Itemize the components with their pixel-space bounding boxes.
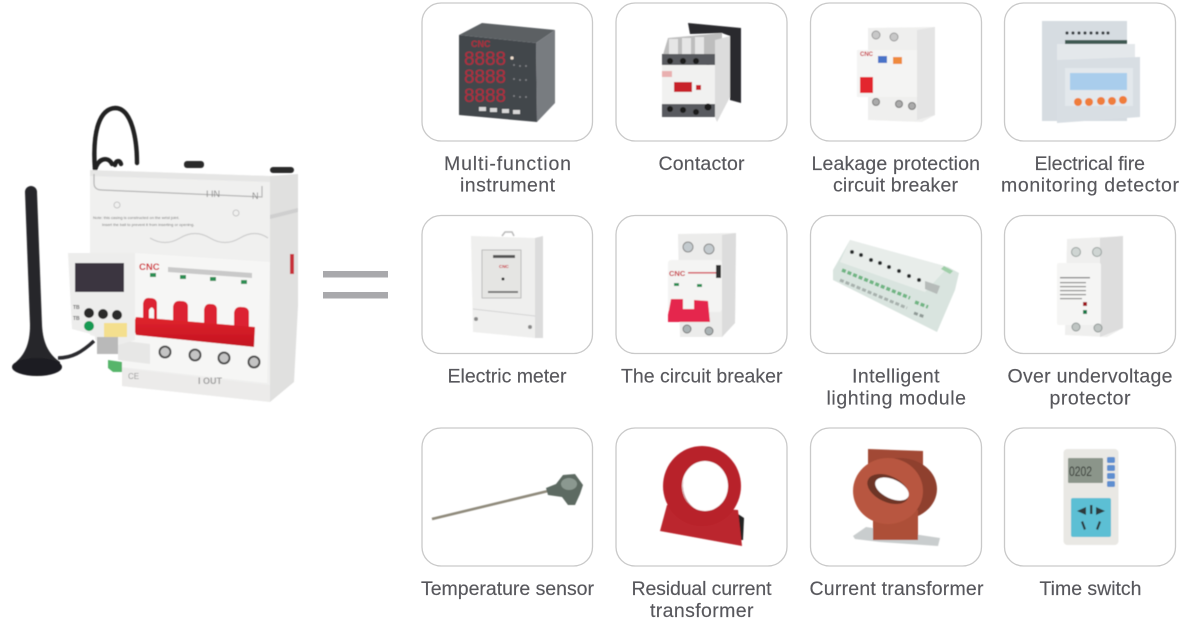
label: Electrical fire — [1034, 153, 1145, 175]
card frame — [616, 216, 787, 354]
icon: panel meter: 8888 — [464, 49, 506, 70]
label: transformer — [650, 600, 754, 622]
label: Electric meter — [448, 366, 567, 388]
icon: wire loop on top of the breaker — [94, 108, 137, 170]
status indicators — [150, 273, 156, 277]
icon: leakage breaker: CNC — [860, 52, 874, 58]
panel: intelligent lighting module — [810, 216, 982, 410]
panel: the circuit breaker — [616, 216, 787, 388]
red toggle handles — [143, 298, 157, 325]
card frame — [810, 428, 982, 566]
breaker body — [90, 161, 298, 402]
icon: magnetic antenna — [12, 186, 94, 376]
label — [1008, 366, 1172, 410]
card frame — [810, 216, 982, 354]
label: circuit breaker — [833, 174, 958, 196]
icon: temperature probe — [432, 474, 583, 519]
card frame — [422, 216, 592, 354]
red linking bar — [133, 317, 255, 347]
green connector — [108, 360, 122, 372]
card frame — [422, 428, 592, 566]
icon: residual current ring — [660, 446, 744, 546]
panel: current transformer — [810, 428, 984, 600]
equals sign — [323, 271, 388, 298]
label: Multi-function — [444, 153, 571, 175]
breaker body: N — [252, 191, 258, 201]
QR code block — [97, 337, 118, 354]
icon: timer socket — [1064, 449, 1118, 545]
icon: contactor — [662, 23, 741, 122]
icon: miniature circuit breaker: CNC — [669, 269, 686, 278]
label — [632, 578, 772, 622]
panel: electric meter — [422, 216, 592, 388]
label: protector — [1050, 388, 1131, 410]
icon: panel meter — [459, 23, 555, 122]
label: Leakage protection — [812, 153, 980, 175]
communication module: TB — [73, 316, 80, 322]
icon: leakage breaker — [857, 27, 935, 122]
card frame — [616, 428, 787, 566]
icon: panel meter: 8888 — [464, 86, 506, 107]
label: Over undervoltage — [1008, 366, 1172, 388]
panel: electrical fire monitoring detector — [1001, 3, 1180, 196]
label: Temperature sensor — [421, 578, 594, 600]
panel: temperature sensor — [421, 428, 594, 600]
icon: fire detector — [1042, 21, 1140, 123]
breaker body: I OUT — [198, 376, 223, 386]
breaker body: Insert the ball to prevent it from inserting or opening. — [102, 222, 194, 227]
card frame — [616, 3, 787, 141]
communication module — [68, 253, 135, 372]
label: Current transformer — [810, 578, 984, 600]
icon: current transformer — [853, 449, 940, 546]
icon: voltage protector — [1057, 236, 1123, 337]
label: monitoring detector — [1001, 174, 1180, 196]
panel: leakage protection circuit breaker — [810, 3, 982, 196]
card frame — [1004, 428, 1176, 566]
CNC logo: CNC — [139, 262, 160, 273]
icon: panel meter: 8888 — [464, 67, 506, 88]
communication module: TB — [73, 305, 80, 311]
label — [1001, 153, 1180, 196]
panel: residual current transformer — [616, 428, 787, 622]
card frame — [810, 3, 982, 141]
breaker body: CE — [128, 372, 139, 381]
card frame — [1004, 3, 1176, 141]
breaker labels: I IN — [206, 189, 220, 199]
panel: contactor — [616, 3, 787, 175]
label: Intelligent — [852, 366, 940, 388]
label: instrument — [460, 174, 556, 196]
icon: miniature circuit breaker — [668, 233, 736, 337]
label: The circuit breaker — [621, 366, 783, 388]
label — [812, 153, 980, 196]
icon: lighting module — [833, 240, 959, 332]
label: Contactor — [658, 153, 745, 175]
card frame — [1004, 216, 1176, 354]
icon: electric meter: CNC — [499, 264, 509, 269]
card frame — [422, 3, 592, 141]
icon: panel meter: CNC — [471, 39, 491, 49]
label — [444, 153, 571, 196]
breaker body: Note: this casing is constructed on the wrist joint. — [93, 215, 179, 220]
panel: smart breaker product — [12, 108, 298, 402]
yellow label — [104, 323, 127, 337]
label — [826, 366, 966, 410]
label: lighting module — [826, 388, 966, 410]
module display — [75, 263, 124, 292]
label: Time switch — [1040, 578, 1142, 600]
icon: timer socket: 0202 — [1069, 463, 1092, 479]
icon: electric meter — [471, 232, 543, 338]
label: Residual current — [632, 578, 772, 600]
terminal screws — [160, 346, 170, 358]
panel: over undervoltage protector — [1004, 216, 1176, 410]
panel: multi-function instrument — [422, 3, 592, 196]
panel: time switch — [1004, 428, 1176, 600]
